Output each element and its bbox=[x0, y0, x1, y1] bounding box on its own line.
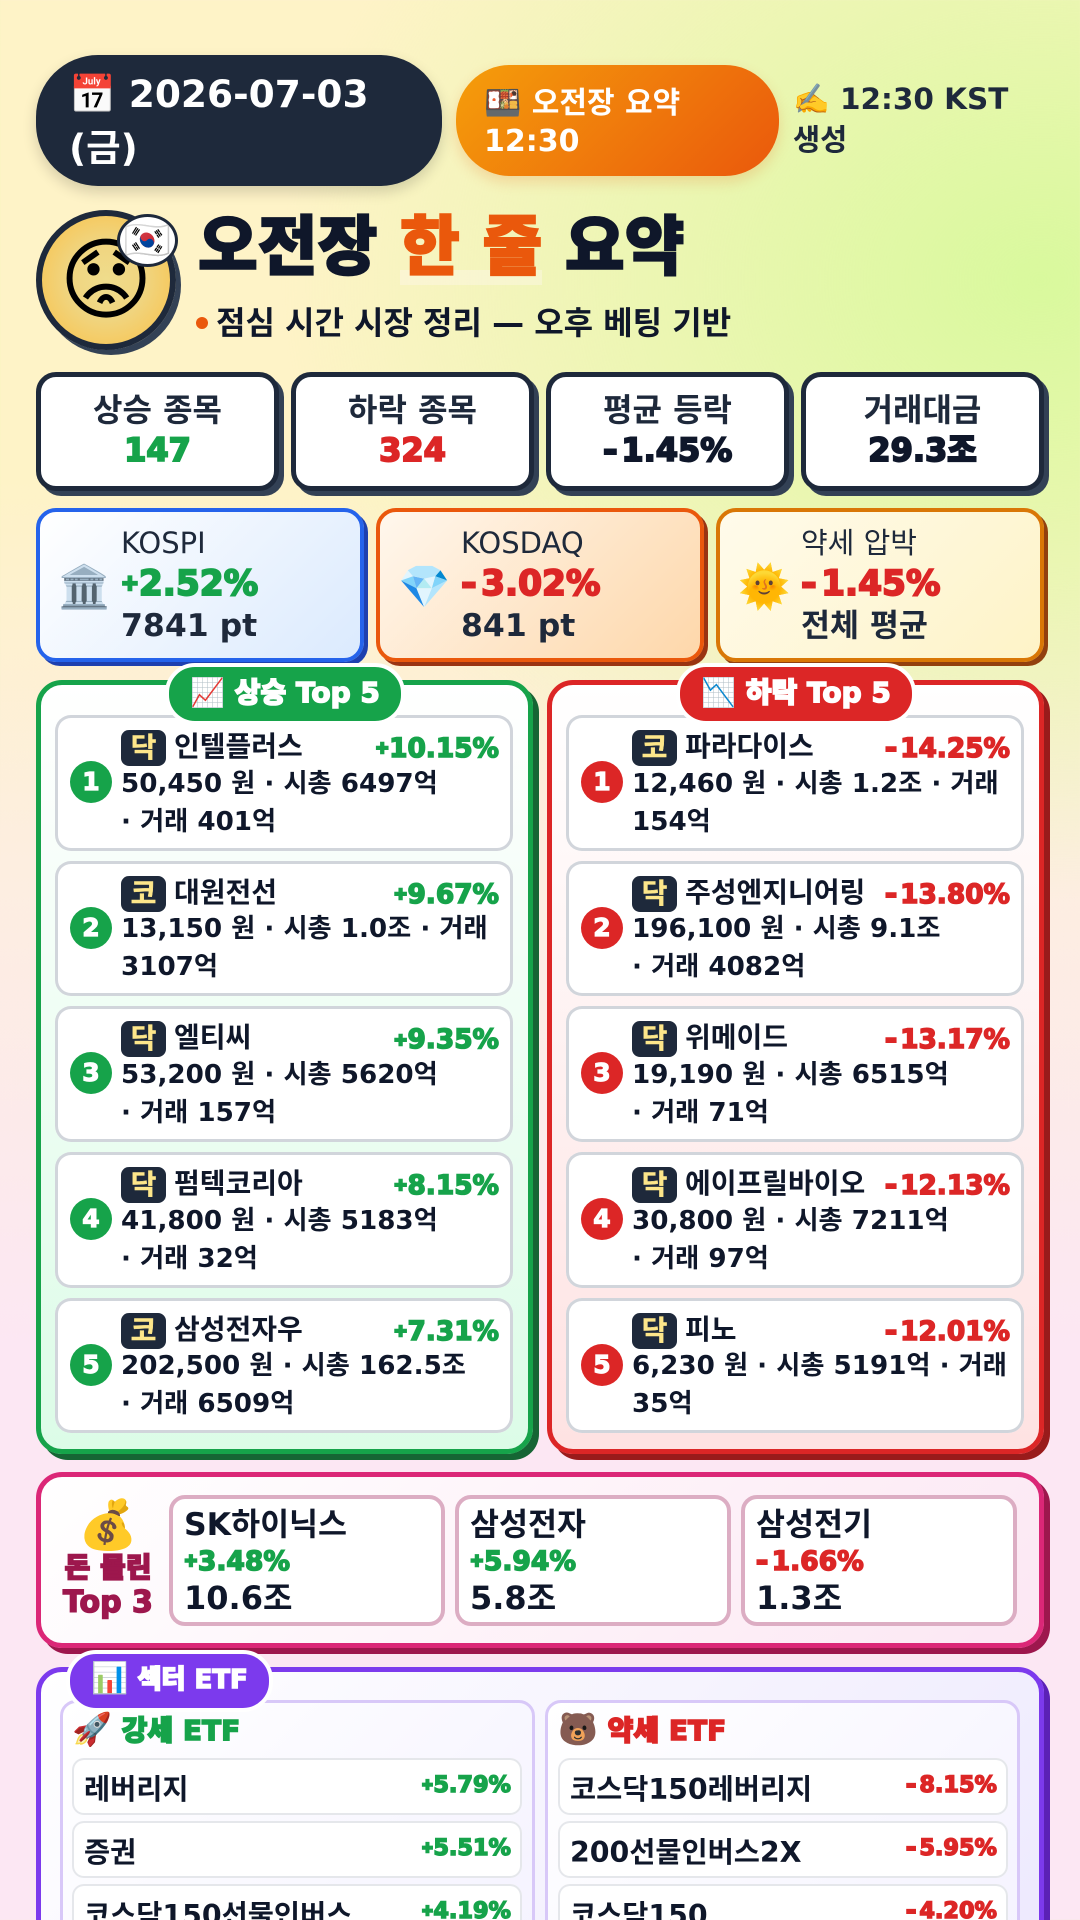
loser 1: 코 bbox=[642, 731, 667, 764]
stat: turnover bbox=[801, 372, 1044, 491]
index card: market mood: 🌞 bbox=[738, 562, 790, 611]
index card: KOSDAQ: 3.02% bbox=[481, 564, 600, 604]
session pill: 🍱 오전장 요약 bbox=[484, 86, 680, 121]
stat: average: - bbox=[603, 431, 617, 469]
subtitle: 점심 시간 시장 정리 — 오후 베팅 기반 bbox=[216, 304, 731, 342]
loser 1: 파라다이스 bbox=[685, 730, 814, 763]
gainer 3: 3 bbox=[82, 1058, 100, 1087]
stat: falling bbox=[291, 372, 534, 491]
loser 1: - bbox=[885, 733, 897, 764]
stat: turnover: 거래대금 bbox=[864, 391, 981, 429]
gainer 3: · 거래 157억 bbox=[121, 1098, 276, 1128]
money card 3 bbox=[741, 1495, 1017, 1626]
gainer 1 bbox=[55, 715, 513, 851]
weak ETF rows bbox=[558, 1758, 1008, 1920]
stat: average bbox=[546, 372, 789, 491]
index card: KOSPI: KOSPI bbox=[121, 526, 206, 560]
loser 4: - bbox=[885, 1170, 897, 1201]
weak ETF 1: 코스닥150레버리지 bbox=[570, 1773, 812, 1806]
money card 1: SK하이닉스 bbox=[184, 1507, 347, 1543]
weak ETF 1 bbox=[558, 1758, 1008, 1815]
money flow heading: 💰 bbox=[78, 1497, 138, 1553]
index card: market mood: 약세 압박 bbox=[801, 526, 917, 560]
gainer 5: +7.31% bbox=[394, 1316, 499, 1347]
flag badge bbox=[117, 214, 178, 267]
money flow heading bbox=[62, 1497, 153, 1620]
strong ETF 3 bbox=[72, 1884, 522, 1920]
loser 3: 닥 bbox=[642, 1022, 667, 1055]
sector ETF pill bbox=[66, 1650, 273, 1712]
index card: market mood: - bbox=[801, 564, 817, 604]
money card 1: 10.6조 bbox=[184, 1579, 292, 1617]
index card: KOSPI: 🏛️ bbox=[58, 562, 110, 611]
date pill bbox=[36, 55, 442, 186]
money card 2: 5.8조 bbox=[470, 1579, 556, 1617]
gainer 3: +9.35% bbox=[394, 1024, 499, 1055]
gainer 2: 3107억 bbox=[121, 952, 218, 982]
panel: gainers bbox=[36, 680, 533, 1454]
date pill: (금) bbox=[69, 126, 138, 170]
loser 2: 주성엔지니어링 bbox=[685, 876, 865, 909]
loser 3: 3 bbox=[593, 1058, 611, 1087]
weak ETF 2: - bbox=[906, 1835, 916, 1861]
gainer 5: · 거래 6509억 bbox=[121, 1389, 294, 1419]
gainer 5: 5 bbox=[82, 1350, 100, 1379]
loser 2: · 거래 4082억 bbox=[632, 952, 805, 982]
gainer 1: 닥 bbox=[131, 731, 156, 764]
strong ETF 1: 레버리지 bbox=[84, 1773, 188, 1806]
index card: market mood: 전체 평균 bbox=[801, 608, 928, 644]
index card: KOSDAQ: KOSDAQ bbox=[461, 526, 584, 560]
stat: average: 1.45% bbox=[621, 431, 732, 469]
weak ETF 2: 5.95% bbox=[919, 1835, 997, 1861]
gainer 3: 엘티씨 bbox=[174, 1021, 251, 1054]
gainer 1: · 거래 401억 bbox=[121, 806, 276, 836]
loser 5: 6,230 원 · 시총 5191억 · 거래 bbox=[632, 1351, 1007, 1381]
gainer 4: +8.15% bbox=[394, 1170, 499, 1201]
weak ETF heading: 🐻 약세 ETF bbox=[558, 1710, 726, 1748]
weak ETF panel bbox=[545, 1700, 1020, 1920]
loser 5: - bbox=[885, 1316, 897, 1347]
loser 2: 13.80% bbox=[900, 879, 1010, 910]
gainers heading pill: 📈 상승 Top 5 bbox=[190, 676, 380, 709]
gainer rows bbox=[55, 715, 513, 1433]
weak ETF 2 bbox=[558, 1821, 1008, 1878]
loser 4: 12.13% bbox=[900, 1170, 1010, 1201]
index card: market mood: 1.45% bbox=[821, 564, 940, 604]
index card: KOSDAQ: 💎 bbox=[398, 562, 450, 611]
loser 4: 닥 bbox=[642, 1168, 667, 1201]
loser 2: - bbox=[885, 879, 897, 910]
gainer 5: 202,500 원 · 시총 162.5조 bbox=[121, 1351, 466, 1381]
loser 4: 4 bbox=[593, 1204, 611, 1233]
gainer 5: 삼성전자우 bbox=[174, 1313, 303, 1346]
loser 5: 35억 bbox=[632, 1389, 693, 1419]
loser 4: 에이프릴바이오 bbox=[685, 1167, 865, 1200]
gainer 4: 4 bbox=[82, 1204, 100, 1233]
money card 3: 1.3조 bbox=[756, 1579, 842, 1617]
gainer 2: 코 bbox=[131, 877, 156, 910]
session pill: 12:30 bbox=[484, 124, 580, 159]
gainer 1: +10.15% bbox=[375, 733, 499, 764]
loser 1: 1 bbox=[593, 767, 611, 796]
panel: money flow bbox=[36, 1472, 1044, 1648]
gainer 2: 대원전선 bbox=[174, 876, 277, 909]
generated time: 생성 bbox=[793, 123, 847, 157]
money flow heading: Top 3 bbox=[63, 1585, 153, 1620]
money flow heading: 돈 몰린 bbox=[64, 1551, 152, 1584]
flag badge: 🇰🇷 bbox=[124, 218, 171, 262]
loser 3 bbox=[566, 1006, 1024, 1142]
gainer 3: 닥 bbox=[131, 1022, 156, 1055]
strong ETF 2: 증권 bbox=[84, 1836, 136, 1869]
loser 5: 5 bbox=[593, 1350, 611, 1379]
stat: rising bbox=[36, 372, 279, 491]
loser 3: 19,190 원 · 시총 6515억 bbox=[632, 1060, 949, 1090]
loser 4: · 거래 97억 bbox=[632, 1244, 769, 1274]
index card: KOSPI bbox=[36, 508, 364, 662]
index card: market mood bbox=[716, 508, 1044, 662]
gainer 2: +9.67% bbox=[394, 879, 499, 910]
loser 5: 12.01% bbox=[900, 1316, 1010, 1347]
index card: KOSDAQ bbox=[376, 508, 704, 662]
panel: sector ETF bbox=[36, 1667, 1044, 1920]
index card: KOSDAQ: - bbox=[461, 564, 477, 604]
gainers heading pill bbox=[165, 663, 405, 725]
title: 오전장 한 줄 요약 bbox=[198, 210, 684, 285]
loser 3: 위메이드 bbox=[685, 1021, 788, 1054]
loser 2: 닥 bbox=[642, 877, 667, 910]
index card: KOSDAQ: 841 pt bbox=[461, 608, 575, 644]
date pill: 📅 2026-07-03 bbox=[69, 72, 369, 116]
gainer 2: 13,150 원 · 시총 1.0조 · 거래 bbox=[121, 914, 488, 944]
loser 3: · 거래 71억 bbox=[632, 1098, 769, 1128]
money card 3: 삼성전기 bbox=[756, 1507, 872, 1543]
weak ETF 2: 200선물인버스2X bbox=[570, 1836, 802, 1869]
gainer 5 bbox=[55, 1298, 513, 1433]
strong ETF 2: +5.51% bbox=[422, 1835, 511, 1861]
gainer 4: 펌텍코리아 bbox=[174, 1167, 303, 1200]
loser 3: - bbox=[885, 1024, 897, 1055]
loser 4: 30,800 원 · 시총 7211억 bbox=[632, 1206, 949, 1236]
loser 2 bbox=[566, 861, 1024, 996]
stat: average: 평균 등락 bbox=[603, 391, 732, 429]
weak ETF 3 bbox=[558, 1884, 1008, 1920]
stat: falling: 324 bbox=[379, 431, 446, 469]
gainer 1: 50,450 원 · 시총 6497억 bbox=[121, 768, 438, 798]
loser 4 bbox=[566, 1152, 1024, 1288]
money card 3: 1.66% bbox=[772, 1546, 864, 1577]
sector ETF pill: 📊 섹터 ETF bbox=[91, 1661, 248, 1696]
gainer 2 bbox=[55, 861, 513, 996]
generated time: ✍️ 12:30 KST bbox=[793, 82, 1008, 116]
loser 1 bbox=[566, 715, 1024, 851]
gainer 3: 53,200 원 · 시총 5620억 bbox=[121, 1060, 438, 1090]
mascot face bbox=[36, 210, 176, 350]
strong ETF panel bbox=[60, 1700, 535, 1920]
losers heading pill bbox=[676, 663, 916, 725]
stat: turnover: 29.3조 bbox=[868, 431, 977, 469]
gainer 3 bbox=[55, 1006, 513, 1142]
mascot bbox=[36, 210, 181, 355]
weak ETF 1: - bbox=[906, 1772, 916, 1798]
index card: KOSPI: 7841 pt bbox=[121, 608, 257, 644]
strong ETF 1 bbox=[72, 1758, 522, 1815]
strong ETF 2 bbox=[72, 1821, 522, 1878]
loser 5 bbox=[566, 1298, 1024, 1433]
losers heading pill: 📉 하락 Top 5 bbox=[701, 676, 891, 709]
money card 1: +3.48% bbox=[184, 1546, 290, 1577]
loser 2: 2 bbox=[593, 913, 611, 942]
loser 1: 12,460 원 · 시총 1.2조 · 거래 bbox=[632, 768, 999, 798]
gainer 4: · 거래 32억 bbox=[121, 1244, 258, 1274]
stat: rising: 상승 종목 bbox=[93, 391, 222, 429]
loser 1: 14.25% bbox=[900, 733, 1010, 764]
money card 2: +5.94% bbox=[470, 1546, 576, 1577]
money card 1 bbox=[169, 1495, 445, 1626]
gainer 4: 41,800 원 · 시총 5183억 bbox=[121, 1206, 438, 1236]
gainer 4 bbox=[55, 1152, 513, 1288]
loser rows bbox=[566, 715, 1024, 1433]
stat: rising: 147 bbox=[124, 431, 191, 469]
weak ETF 1: 8.15% bbox=[919, 1772, 997, 1798]
gainer 4: 닥 bbox=[131, 1168, 156, 1201]
loser 1: 154억 bbox=[632, 806, 711, 836]
loser 3: 13.17% bbox=[900, 1024, 1010, 1055]
gainer 5: 코 bbox=[131, 1314, 156, 1347]
loser 2: 196,100 원 · 시총 9.1조 bbox=[632, 914, 940, 944]
generated time bbox=[793, 82, 1008, 157]
loser 5: 피노 bbox=[685, 1313, 737, 1346]
strong ETF heading: 🚀 강세 ETF bbox=[72, 1710, 240, 1748]
stat: falling: 하락 종목 bbox=[348, 391, 477, 429]
gainer 2: 2 bbox=[82, 913, 100, 942]
mascot face: 😟 bbox=[59, 228, 153, 333]
strong ETF rows bbox=[72, 1758, 522, 1920]
money card 3: - bbox=[756, 1546, 768, 1577]
strong ETF 1: +5.79% bbox=[422, 1772, 511, 1798]
session pill bbox=[456, 65, 779, 176]
index card: KOSPI: +2.52% bbox=[121, 564, 258, 604]
gainer 1: 인텔플러스 bbox=[174, 730, 303, 763]
money card 2 bbox=[455, 1495, 731, 1626]
loser 5: 닥 bbox=[642, 1314, 667, 1347]
panel: losers bbox=[547, 680, 1044, 1454]
money card 2: 삼성전자 bbox=[470, 1507, 586, 1543]
gainer 1: 1 bbox=[82, 767, 100, 796]
